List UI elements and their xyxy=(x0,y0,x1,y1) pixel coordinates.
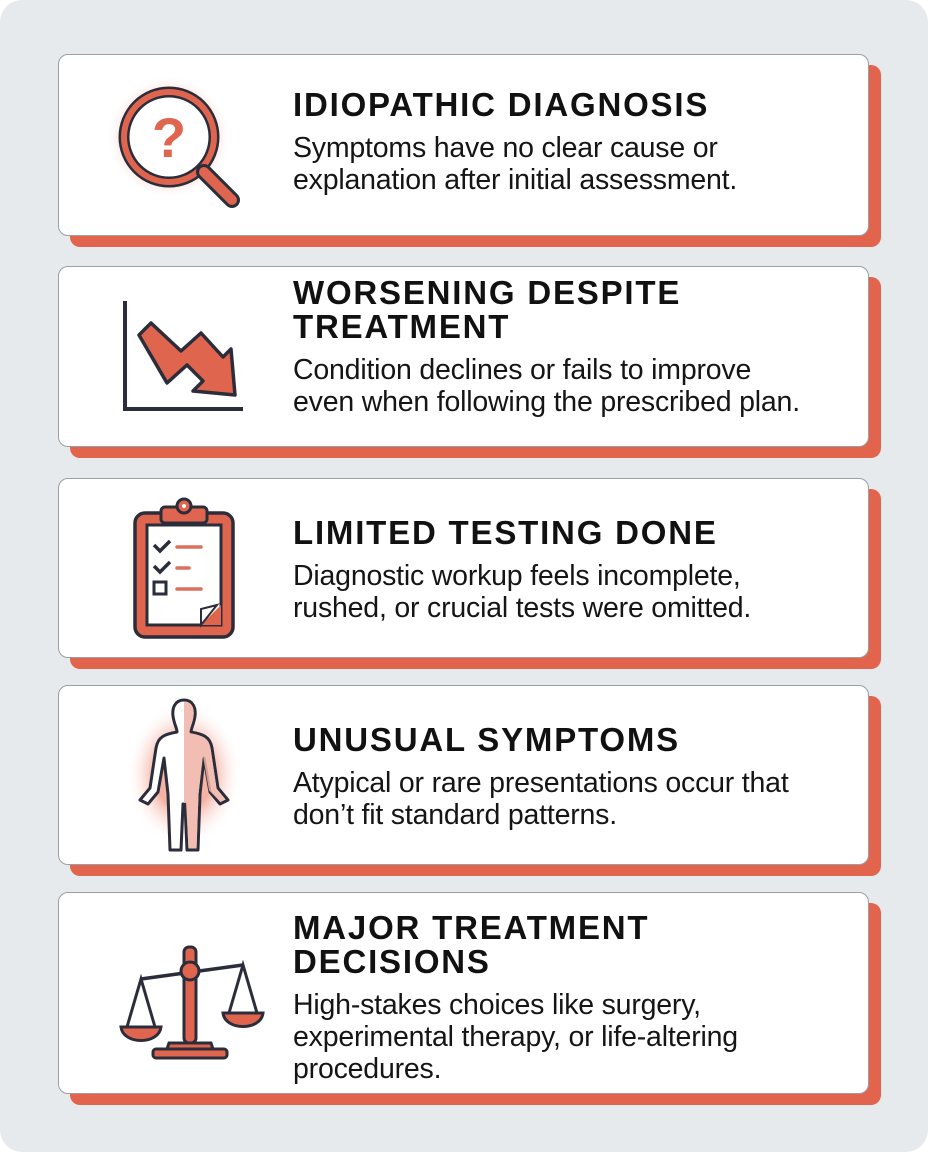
text: major decisions: High-stakes choices like surgery, xyxy=(293,989,701,1021)
panel: limited testing done xyxy=(58,478,869,658)
icon: declining chart xyxy=(123,301,243,411)
text: idiopathic xyxy=(293,86,737,196)
panel: worsening despite treatment xyxy=(58,266,869,447)
text: major decisions: experimental therapy, or life-altering xyxy=(293,1021,738,1053)
icon: scales xyxy=(119,946,265,1060)
text: idiopathic: Symptoms have no clear cause or xyxy=(293,132,718,164)
panel: major treatment decisions xyxy=(58,892,869,1094)
text: unusual: don’t fit standard patterns. xyxy=(293,799,617,831)
text: major decisions xyxy=(293,909,738,1085)
text: worsening: even when following the prescribed plan. xyxy=(293,386,800,418)
icon: human body xyxy=(135,698,234,852)
text: major decisions: MAJOR TREATMENT xyxy=(293,909,649,946)
text: worsening: Condition declines or fails to improve xyxy=(293,354,751,386)
text: limited testing: rushed, or crucial tests were omitted. xyxy=(293,592,751,624)
text: major decisions: procedures. xyxy=(293,1053,441,1085)
text: unusual: Atypical or rare presentations occur that xyxy=(293,767,789,799)
icon: clipboard xyxy=(133,498,235,639)
text: limited testing xyxy=(293,514,751,624)
panel: unusual symptoms xyxy=(58,685,869,865)
text: limited testing: LIMITED TESTING DONE xyxy=(293,514,718,551)
text: idiopathic: explanation after initial assessment. xyxy=(293,164,737,196)
text: worsening: TREATMENT xyxy=(293,308,510,345)
icon: magnifier question xyxy=(114,82,240,208)
text: worsening xyxy=(293,274,800,418)
icon: magnifier question: ? xyxy=(152,106,186,169)
text: worsening: WORSENING DESPITE xyxy=(293,274,681,311)
text: major decisions: DECISIONS xyxy=(293,943,491,980)
text: unusual xyxy=(293,721,789,831)
text: unusual: UNUSUAL SYMPTOMS xyxy=(293,721,680,758)
text: limited testing: Diagnostic workup feels incomplete, xyxy=(293,560,741,592)
text: idiopathic: IDIOPATHIC DIAGNOSIS xyxy=(293,86,709,123)
panel: idiopathic diagnosis xyxy=(58,54,869,236)
